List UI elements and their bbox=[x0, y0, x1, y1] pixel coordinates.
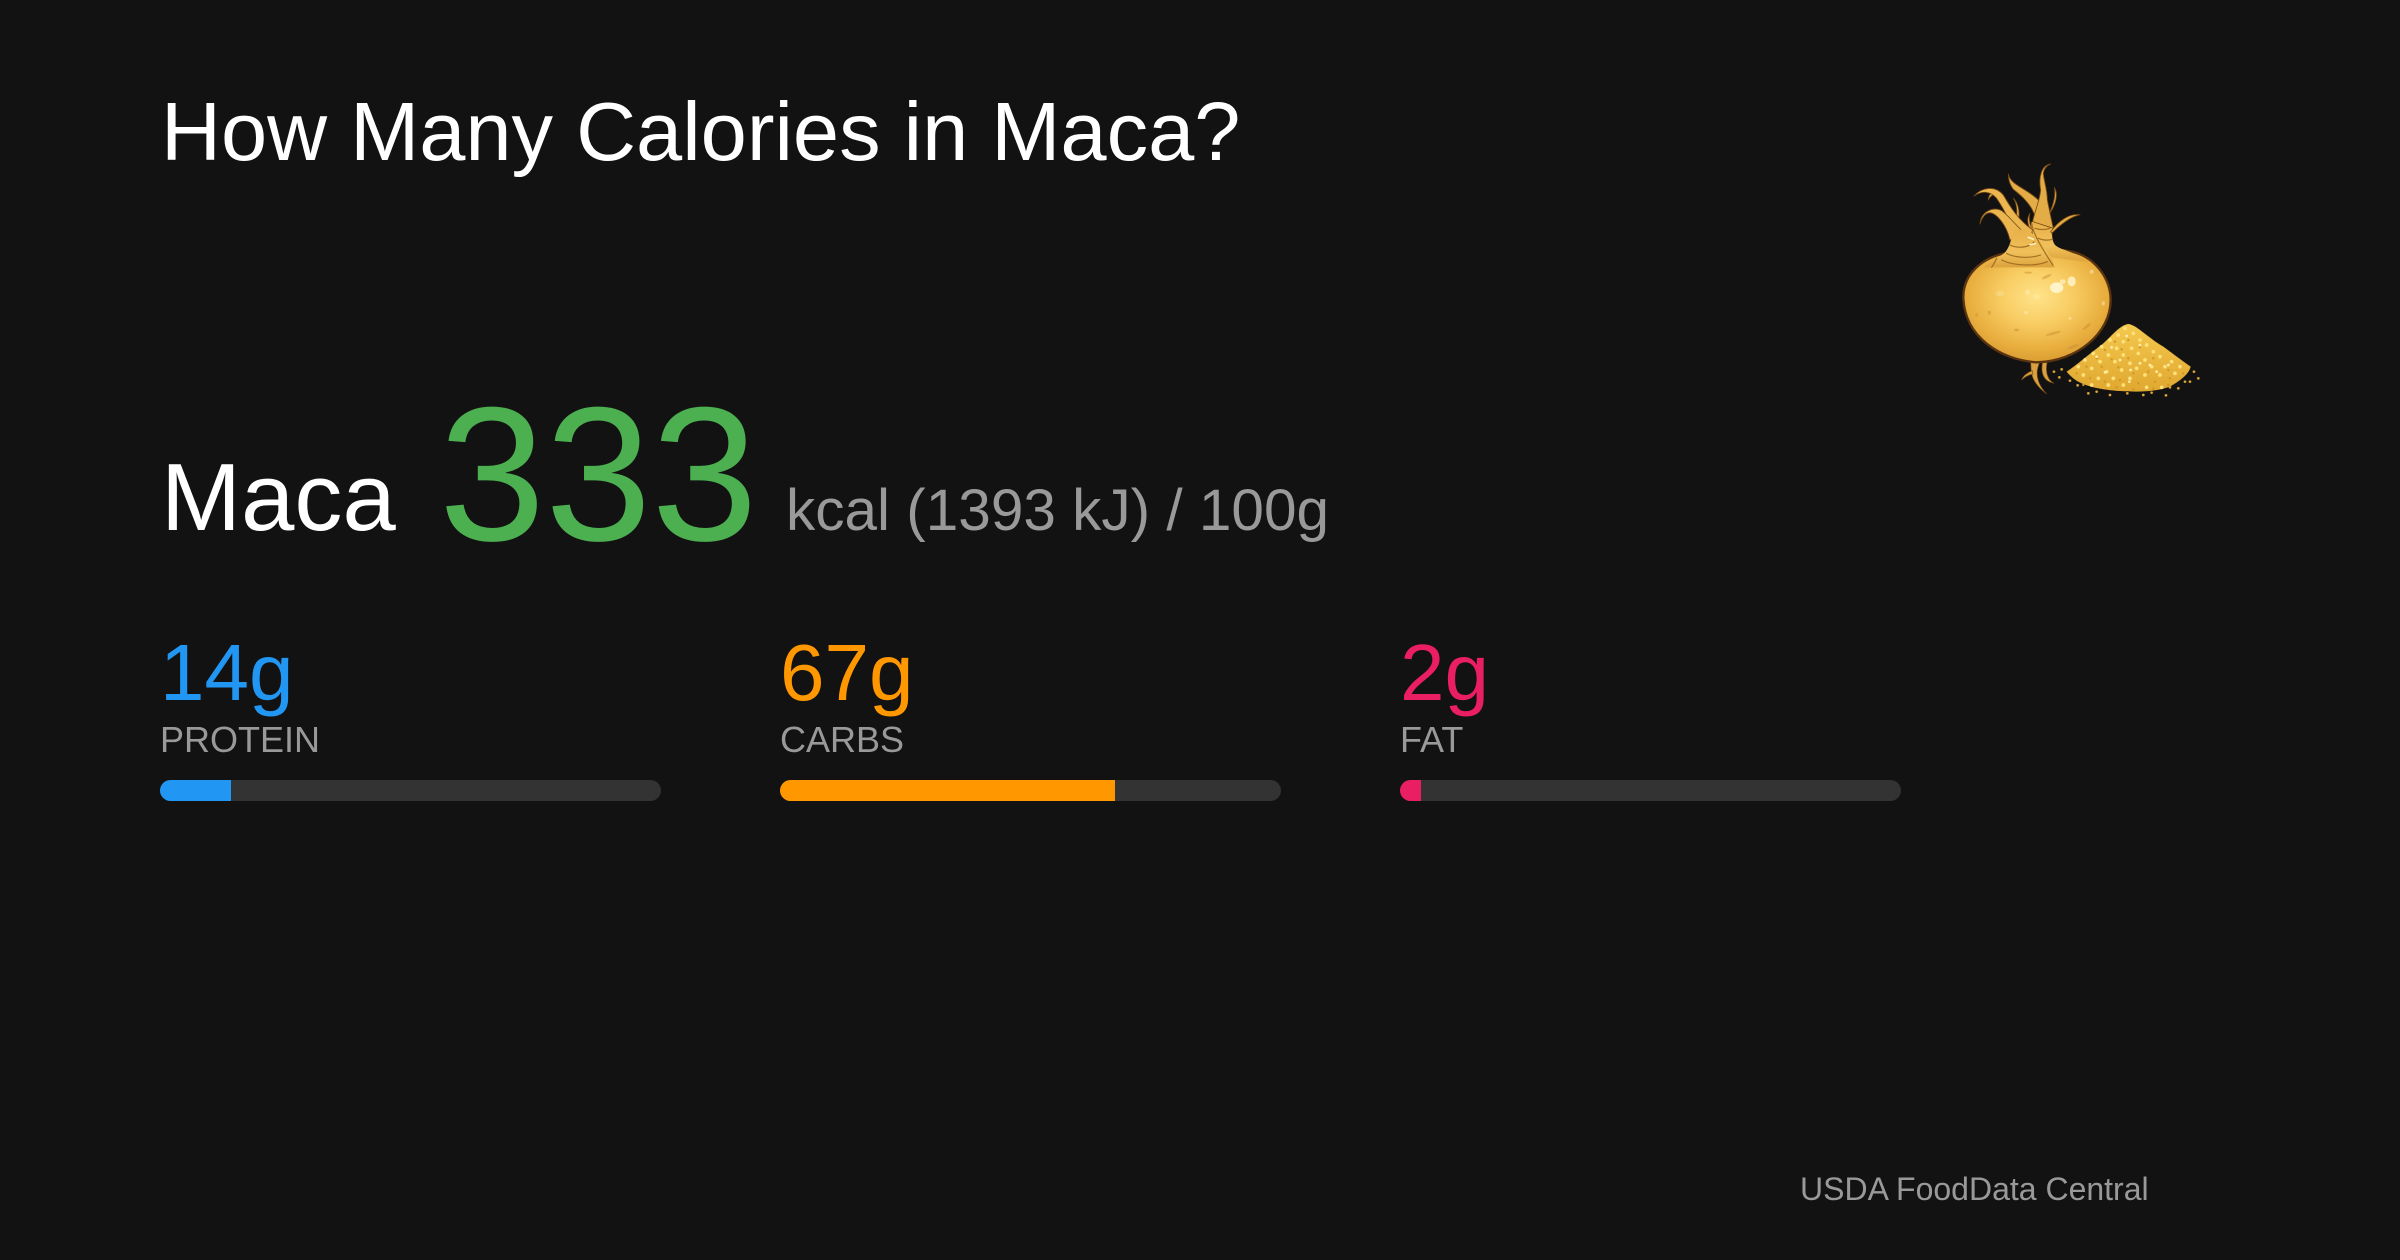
left neck bbox=[1983, 229, 2055, 267]
protein bar bbox=[160, 780, 661, 801]
title: How Many Calories in Maca? bbox=[161, 85, 1240, 178]
root crown bbox=[1974, 164, 2088, 267]
icon: maca root with powder bbox=[1963, 164, 2198, 395]
left tendrils bbox=[1974, 188, 2033, 242]
panel: protein bbox=[160, 628, 661, 801]
carbs bar bbox=[780, 780, 1281, 801]
neck wrinkles bbox=[1992, 223, 2053, 267]
calorie value: 333 bbox=[439, 368, 758, 581]
tail roots bbox=[2022, 361, 2054, 394]
bulb highlights bbox=[1996, 270, 2105, 320]
light grains bbox=[2078, 328, 2180, 387]
calorie unit: kcal (1393 kJ) / 100g bbox=[786, 478, 1329, 543]
source: USDA FoodData Central bbox=[1800, 1171, 2149, 1207]
protein value: 14g bbox=[160, 628, 293, 717]
scattered grains bbox=[2054, 369, 2198, 395]
fat value: 2g bbox=[1400, 628, 1489, 717]
panel: fat bbox=[1400, 628, 1901, 801]
powder pile bbox=[2054, 324, 2198, 395]
darker grains bbox=[2077, 340, 2183, 389]
carbs value: 67g bbox=[780, 628, 913, 717]
neck highlights bbox=[2028, 237, 2035, 245]
food name: Maca bbox=[161, 444, 396, 551]
pile base bbox=[2067, 324, 2191, 392]
carbs label: CARBS bbox=[780, 719, 904, 760]
bright grains bbox=[2097, 336, 2168, 382]
protein label: PROTEIN bbox=[160, 719, 320, 760]
bulb speckles bbox=[1975, 272, 2092, 350]
fat label: FAT bbox=[1400, 719, 1463, 760]
bulb bbox=[1963, 249, 2111, 362]
fat bar bbox=[1400, 780, 1901, 801]
right tendrils bbox=[2008, 164, 2080, 233]
right neck bbox=[2031, 222, 2088, 262]
panel: carbs bbox=[780, 628, 1281, 801]
